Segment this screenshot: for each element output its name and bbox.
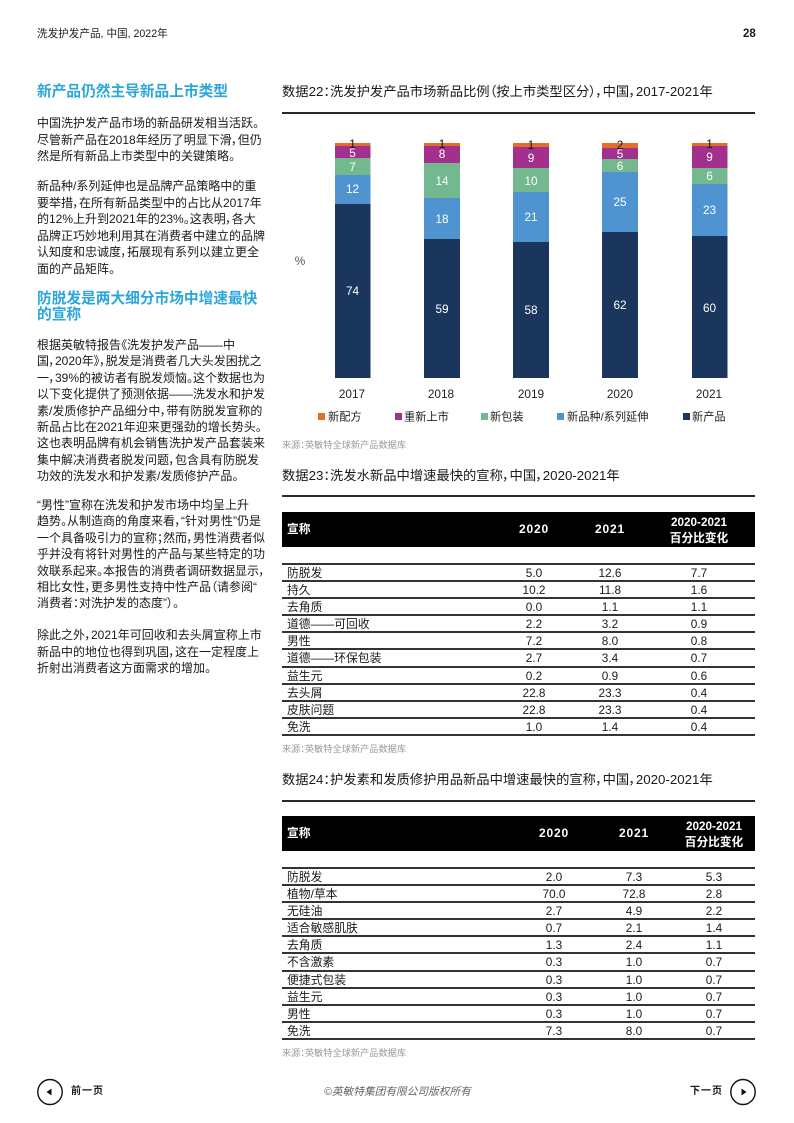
text block: intro paragraph: 然是所有新品上市类型中的关键策略。: [37, 149, 235, 163]
table 24 rows: 70.0: [543, 887, 565, 901]
table 23 rows: 持久: [287, 583, 311, 597]
table 24 rows: 男性: [287, 1007, 311, 1021]
table 23 rows: 0.2: [526, 669, 542, 683]
table 24 rows: 7.3: [626, 870, 642, 884]
chart legend: [318, 410, 726, 424]
text block: anti hair loss paragraph: 这也表明品牌有机会销售洗护发产品套装来: [37, 436, 265, 450]
table 24 rows: 不含激素: [287, 955, 334, 969]
figure 23 title: 数据23：洗发水新品中增速最快的宣称，中国，2020-2021年: [282, 468, 620, 483]
table 23 rows: 2.2: [526, 617, 542, 631]
text block: line extension paragraph: 品牌正巧妙地利用其在消费者中建立的品牌: [37, 228, 265, 242]
table 23 rows: 10.2: [523, 583, 545, 597]
table 24 rows: 0.7: [706, 973, 722, 987]
table 24 header: 2020-2021: [686, 820, 742, 833]
text block: line extension paragraph: 的12%上升到2021年的23%。这表明，各大: [37, 212, 256, 226]
figure 22 title: 数据22：洗发护发产品市场新品比例（按上市类型区分），中国，2017-2021年: [282, 84, 713, 99]
table 24 rows: 1.3: [546, 938, 562, 952]
bar 2017: 74: [346, 284, 359, 298]
chart legend: 重新上市: [404, 410, 449, 424]
bar 2018: 59: [435, 302, 449, 316]
table 23 rows: 23.3: [599, 703, 621, 717]
next page label: 下一页: [690, 1086, 723, 1097]
table 24 rows: 2.0: [546, 870, 562, 884]
table 23 rows: 益生元: [287, 669, 322, 683]
copyright: ©英敏特集团有限公司版权所有: [324, 1086, 471, 1098]
table 24 rows: 1.4: [706, 921, 722, 935]
text block: line extension paragraph: 新品种/系列延伸也是品牌产品策略中的重: [37, 179, 256, 193]
table 23 rows: 道德——可回收: [287, 617, 370, 631]
bar 2021: 1: [706, 137, 713, 151]
table 23 rows: 男性: [287, 634, 311, 648]
text block: male claim paragraph: 乎并没有将针对男性的产品与某些特定的功: [37, 547, 265, 561]
table 23 rows: 0.8: [691, 634, 707, 648]
bar 2019: [513, 138, 549, 378]
text block: male claim paragraph: 一个具备吸引力的宣称；然而，男性消费者似: [37, 531, 265, 545]
text block: male claim paragraph: 相比女性，更多男性支持中性产品（请参阅“: [37, 580, 257, 594]
bar 2019: 1: [528, 138, 534, 152]
bar 2018: 18: [435, 212, 449, 226]
table 24 rows: 0.7: [546, 921, 562, 935]
table 23 rows: 皮肤问题: [287, 703, 334, 717]
table 23 rows: 去头屑: [287, 686, 322, 700]
text block: anti hair loss paragraph: 素/发质修护产品细分中，带有防脱发宣称的: [37, 404, 262, 418]
year labels: [339, 387, 722, 401]
table 24 rows: 8.0: [626, 1024, 642, 1038]
previous page label: 前一页: [71, 1086, 104, 1097]
table 23 rows: 0.4: [691, 720, 707, 734]
table 23 rows: 免洗: [287, 720, 311, 734]
table 24 rows: 无硅油: [287, 904, 322, 918]
table 24 rows: 1.0: [626, 973, 642, 987]
table 24 rows: 1.0: [626, 1007, 642, 1021]
bar 2020: 62: [613, 298, 627, 312]
table 24 rows: 4.9: [626, 904, 642, 918]
table 23 rows: 5.0: [526, 566, 542, 580]
icon: next page button: [730, 1078, 756, 1106]
text block: male claim paragraph: 趋势。从制造商的角度来看，“针对男性”仍是: [37, 514, 261, 528]
year labels: 2020: [607, 387, 634, 401]
icon: previous page button: [37, 1078, 63, 1106]
table 23 rows: 0.4: [691, 686, 707, 700]
table 24 rows: 72.8: [623, 887, 645, 901]
text block: anti hair loss paragraph: 以下变化提供了预测依据——洗发水和护发: [37, 387, 265, 401]
table 23 rows: 8.0: [602, 634, 618, 648]
table 23 rows: 1.1: [602, 600, 618, 614]
bar 2019: 9: [528, 151, 534, 165]
table 24 rows: 2.7: [546, 904, 562, 918]
table 24 rows: 2.2: [706, 904, 722, 918]
bar 2018: 14: [435, 174, 449, 188]
bar 2019: 58: [524, 303, 538, 317]
text block: anti hair loss paragraph: 国，2020年》，脱发是消费者几大头发困扰之: [37, 354, 262, 368]
text block: male claim paragraph: [37, 498, 265, 610]
text block: male claim paragraph: “男性”宣称在洗发和护发市场中均呈上升: [37, 498, 249, 512]
table 23 header: 百分比变化: [670, 532, 728, 544]
table 24 rows: 1.0: [626, 955, 642, 969]
table 23 rows: 3.2: [602, 617, 618, 631]
figure 24 title: 数据24：护发素和发质修护用品新品中增速最快的宣称，中国，2020-2021年: [282, 772, 713, 787]
table 23 rows: 22.8: [523, 703, 545, 717]
table 23 rows: 0.7: [691, 651, 707, 665]
table 24 rows: 2.1: [626, 921, 642, 935]
table 24 rows: 0.7: [706, 1007, 722, 1021]
bar 2020: 5: [617, 147, 624, 161]
table 23 rows: 11.8: [599, 583, 621, 597]
bar 2020: 2: [617, 138, 623, 152]
text block: anti hair loss paragraph: 新品占比在2021年迎来更强劲的增长势头。: [37, 420, 262, 434]
table 24 rows: 1.0: [626, 990, 642, 1004]
table 23 header: [282, 512, 755, 547]
text block: line extension paragraph: 要举措，在所有新品类型中的占比从2017年: [37, 196, 262, 210]
table 23 rows: 0.4: [691, 703, 707, 717]
table 23 rows: 12.6: [599, 566, 621, 580]
bar 2019: 21: [524, 210, 538, 224]
bar 2020: [602, 138, 638, 378]
heading: anti hair loss claim: [37, 290, 257, 323]
year labels: 2021: [696, 387, 722, 401]
table 23 rows: 7.2: [526, 634, 542, 648]
table 24 rows: 0.3: [546, 955, 562, 969]
chart legend: 新产品: [692, 410, 726, 424]
table 23 rows: 去角质: [287, 600, 322, 614]
bar 2017: 1: [349, 137, 356, 151]
table 23 rows: 0.9: [602, 669, 618, 683]
bar 2021: [692, 137, 728, 378]
bar 2017: 12: [346, 182, 359, 196]
table 24 rows: [282, 867, 755, 1040]
bar 2021: 60: [703, 301, 716, 315]
table 24 rows: 2.4: [626, 938, 642, 952]
table 24 rows: 5.3: [706, 870, 722, 884]
table 24 rows: 7.3: [546, 1024, 562, 1038]
year labels: 2017: [339, 387, 365, 401]
chart legend: 新品种/系列延伸: [567, 410, 648, 424]
text block: line extension paragraph: 面的产品矩阵。: [37, 262, 115, 276]
bar 2017: 5: [349, 146, 356, 160]
text block: intro paragraph: [37, 116, 262, 163]
bar 2017: 7: [349, 160, 356, 174]
text block: line extension paragraph: [37, 179, 265, 276]
table 23 rows: 0.6: [691, 669, 707, 683]
table 24 rows: 0.7: [706, 990, 722, 1004]
table 23 rows: 1.1: [691, 600, 707, 614]
chart legend: 新配方: [328, 410, 362, 424]
page number: 28: [743, 28, 756, 40]
text block: anti hair loss paragraph: 功效的洗发水和护发素/发质修护产品。: [37, 469, 238, 483]
table 24 header: 2021: [619, 826, 649, 840]
table 24 rows: 2.8: [706, 887, 722, 901]
table 24 rows: 益生元: [287, 990, 322, 1004]
table 24 rows: 去角质: [287, 938, 322, 952]
table 23 rows: 3.4: [602, 651, 618, 665]
bar 2017: [335, 137, 370, 378]
table 23 header: 宣称: [287, 523, 310, 536]
figure 24 source: 来源：英敏特全球新产品数据库: [282, 1048, 406, 1058]
table 23 rows: 0.9: [691, 617, 707, 631]
text block: anti hair loss paragraph: 集中解决消费者脱发问题，包含具有防脱发: [37, 453, 259, 467]
bar 2018: 1: [439, 137, 445, 151]
text block: recycling and dandruff paragraph: 折射出消费者这方面需求的增加。: [37, 661, 211, 675]
text block: intro paragraph: 中国洗护发产品市场的新品研发相当活跃。: [37, 116, 259, 130]
year labels: 2018: [428, 387, 455, 401]
bar 2020: 6: [617, 159, 624, 173]
table 23 rows: 1.6: [691, 583, 707, 597]
stacked bar chart: new launches by type: [295, 137, 728, 424]
heading: anti hair loss claim: 防脱发是两大细分市场中增速最快: [37, 291, 257, 307]
figure 22 source: 来源：英敏特全球新产品数据库: [282, 440, 406, 450]
table 23 rows: 1.0: [526, 720, 542, 734]
text block: anti hair loss paragraph: 一，39%的被访者有脱发烦恼。这个数据也为: [37, 371, 265, 385]
table 24 rows: 0.7: [706, 1024, 722, 1038]
bar 2018: 8: [439, 147, 446, 161]
text block: anti hair loss paragraph: 根据英敏特报告《洗发护发产品——中: [37, 338, 235, 352]
chart legend: 新包装: [490, 410, 524, 424]
table 23 rows: 2.7: [526, 651, 542, 665]
text block: recycling and dandruff paragraph: 除此之外，2021年可回收和去头屑宣称上市: [37, 628, 262, 642]
bar 2018: [424, 137, 460, 378]
table 23 header: 2021: [595, 522, 625, 536]
text block: line extension paragraph: 认知度和忠诚度，拓展现有系列以建立更全: [37, 245, 259, 259]
table 24 header: 百分比变化: [685, 836, 743, 848]
table 23 rows: [282, 563, 755, 736]
table 23 rows: 22.8: [523, 686, 545, 700]
bar 2021: 23: [703, 203, 716, 217]
table 24 rows: 0.3: [546, 1007, 562, 1021]
table 24 rows: 0.3: [546, 990, 562, 1004]
table 23 rows: 道德——环保包装: [287, 651, 381, 665]
text block: recycling and dandruff paragraph: 新品中的地位也得到巩固，这在一定程度上: [37, 644, 259, 658]
table 24 header: 2020: [539, 826, 569, 840]
bar 2021: 6: [706, 169, 713, 183]
bar 2019: 10: [524, 174, 538, 188]
axis unit: %: [295, 254, 306, 268]
table 23 header: 2020: [519, 522, 549, 536]
text block: intro paragraph: 尽管新产品在2018年经历了明显下滑，但仍: [37, 132, 262, 146]
table 24 rows: 适合敏感肌肤: [287, 921, 358, 935]
figure 23 source: 来源：英敏特全球新产品数据库: [282, 744, 406, 754]
table 24 header: [282, 816, 755, 851]
bar 2020: 25: [613, 195, 627, 209]
table 23 rows: 23.3: [599, 686, 621, 700]
table 23 rows: 7.7: [691, 566, 707, 580]
table 23 rows: 0.0: [526, 600, 542, 614]
table 24 rows: 1.1: [706, 938, 722, 952]
table 24 rows: 防脱发: [287, 870, 322, 884]
table 24 rows: 便捷式包装: [287, 973, 346, 987]
text block: male claim paragraph: 消费者：对洗护发的态度”）。: [37, 596, 179, 610]
table 24 rows: 植物/草本: [287, 887, 337, 901]
heading: new products dominate: 新产品仍然主导新品上市类型: [37, 84, 228, 100]
text block: recycling and dandruff paragraph: [37, 628, 262, 675]
table 23 header: 2020-2021: [671, 516, 727, 529]
table 24 rows: 0.3: [546, 973, 562, 987]
table 24 rows: 0.7: [706, 955, 722, 969]
table 24 header: 宣称: [287, 827, 310, 840]
text block: male claim paragraph: 效联系起来。本报告的消费者调研数据显示，: [37, 564, 265, 578]
table 23 rows: 防脱发: [287, 566, 322, 580]
table 24 rows: 免洗: [287, 1024, 311, 1038]
running header: 洗发护发产品, 中国, 2022年: [37, 28, 168, 40]
year labels: 2019: [518, 387, 544, 401]
bar 2021: 9: [706, 150, 713, 164]
table 23 rows: 1.4: [602, 720, 618, 734]
text block: anti hair loss paragraph: [37, 338, 265, 483]
heading: anti hair loss claim: 的宣称: [37, 307, 81, 323]
